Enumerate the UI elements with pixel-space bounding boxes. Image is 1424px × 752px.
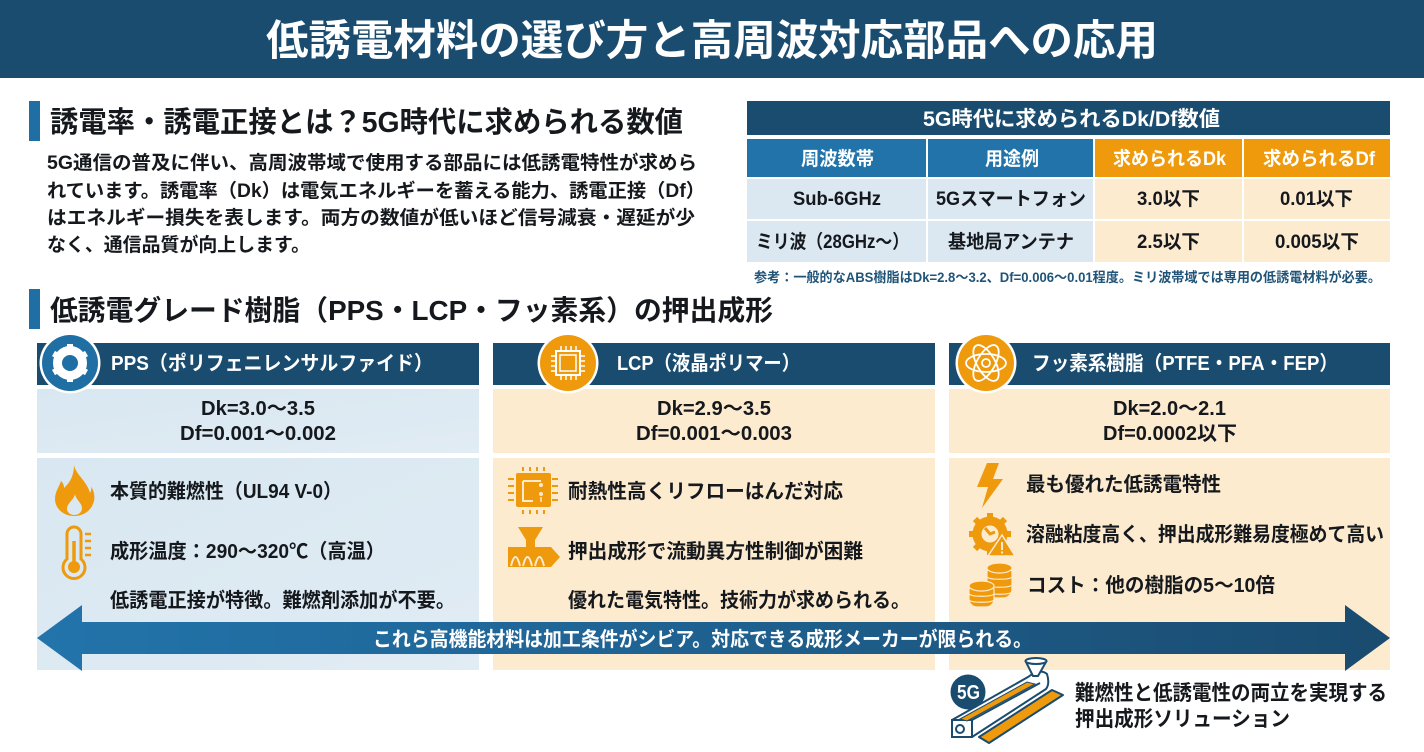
text block: intro paragraph: なく、通信品質が向上します。 [47, 233, 310, 256]
table row: Sub-6GHz: 0.01以下 [1280, 189, 1353, 210]
table header row [747, 139, 1390, 177]
PPS values: Dk=3.0～3.5 [201, 398, 315, 420]
table row: millimeter wave: ミリ波（28GHz～） [756, 231, 909, 253]
arrow: double-headed banner: これら高機能材料は加工条件がシビア。対応できる成形メーカーが限られる。 [373, 627, 1032, 651]
LCP header [493, 343, 935, 385]
table title [747, 101, 1390, 135]
table row: Sub-6GHz: 5Gスマートフォン [936, 189, 1086, 210]
PPS header: PPS（ポリフェニレンサルファイド） [111, 352, 433, 375]
LCP feature: reflow: 耐熱性高くリフローはんだ対応 [568, 480, 843, 503]
table header row: 周波数帯 [801, 148, 874, 170]
panel: fluoropolymer [949, 332, 1390, 670]
table row: Sub-6GHz [747, 179, 1390, 219]
table row: millimeter wave: 2.5以下 [1137, 232, 1200, 253]
icon: circuit board [508, 467, 558, 514]
icon: extruder screw [508, 527, 560, 567]
fluoropolymer header: フッ素系樹脂（PTFE・PFA・FEP） [1032, 352, 1338, 375]
LCP values: Dk=2.9～3.5 [657, 398, 771, 420]
Fluoropolymer values: Df=0.0002以下 [1103, 423, 1237, 445]
text block: intro paragraph: はエネルギー損失を表します。両方の数値が低いほど信号減衰・遅延が少 [47, 206, 695, 229]
panel: PPS [37, 332, 479, 670]
table row: millimeter wave: 0.005以下 [1275, 232, 1359, 253]
LCP values: Df=0.001～0.003 [636, 423, 792, 445]
table header row: 用途例 [985, 148, 1039, 170]
panel: LCP [493, 332, 935, 670]
table row: Sub-6GHz: 3.0以下 [1137, 189, 1200, 210]
icon: coins [969, 563, 1012, 607]
PPS feature: molding temperature: 成形温度：290～320℃（高温） [110, 539, 385, 563]
table row: Sub-6GHz: Sub-6GHz [793, 189, 881, 210]
icon: gear [40, 332, 100, 394]
table header row: 求められるDk [1113, 147, 1226, 170]
LCP values [636, 398, 792, 445]
icon: thermometer [63, 527, 91, 578]
table note: 参考：一般的なABS樹脂はDk=2.8～3.2、Df=0.006～0.01程度。ミリ波帯域では専用の低誘電材料が必要。 [754, 269, 1381, 285]
table header row: 求められるDf [1263, 147, 1376, 170]
text block: intro paragraph: 5G通信の普及に伴い、高周波帯域で使用する部品には低誘電特性が求めら [47, 151, 697, 174]
PPS header [37, 343, 479, 385]
Fluoropolymer values [1103, 398, 1237, 445]
table row: millimeter wave: 基地局アンテナ [948, 231, 1074, 253]
PPS feature: summary: 低誘電正接が特徴。難燃剤添加が不要。 [110, 588, 455, 612]
text block: intro paragraph [47, 151, 705, 256]
table row: millimeter wave [747, 221, 1390, 262]
icon: atom [956, 332, 1016, 394]
PPS feature: flame retardancy: 本質的難燃性（UL94 V-0） [110, 480, 342, 503]
Fluoropolymer feature: viscosity: 溶融粘度高く、押出成形難易度極めて高い [1026, 522, 1384, 546]
icon: lightning [977, 463, 1003, 508]
icon: chip [538, 332, 598, 394]
PPS values: Df=0.001～0.002 [180, 423, 336, 445]
Fluoropolymer feature: dielectric: 最も優れた低誘電特性 [1026, 473, 1221, 496]
icon: gear warning [969, 513, 1015, 556]
table title: 5G時代に求められるDk/Df数値 [923, 108, 1220, 131]
heading: dielectric section: 誘電率・誘電正接とは？5G時代に求められる数値 [50, 106, 683, 139]
LCP header: LCP（液晶ポリマー） [617, 352, 800, 375]
heading: extrusion section: 低誘電グレード樹脂（PPS・LCP・フッ素系）の押出成形 [50, 294, 773, 326]
PPS values [180, 398, 336, 445]
fluoropolymer header [949, 343, 1390, 385]
panel: Dk/Df requirement table [747, 101, 1390, 262]
icon: flame [55, 465, 94, 516]
icon: 5G extrusion profile [950, 658, 1063, 743]
callout: extrusion solution: 押出成形ソリューション [1075, 707, 1290, 731]
LCP feature: extrusion difficulty: 押出成形で流動異方性制御が困難 [568, 539, 863, 563]
callout: extrusion solution [1075, 682, 1387, 731]
callout: extrusion solution: 難燃性と低誘電性の両立を実現する [1075, 682, 1387, 705]
Fluoropolymer feature: cost: コスト：他の樹脂の5～10倍 [1027, 574, 1275, 597]
arrow: double-headed banner [37, 605, 1390, 671]
icon: 5G extrusion profile: 5G [957, 682, 980, 704]
title [0, 0, 1424, 78]
LCP feature: summary: 優れた電気特性。技術力が求められる。 [568, 588, 910, 612]
Fluoropolymer values: Dk=2.0～2.1 [1113, 398, 1226, 420]
title: 低誘電材料の選び方と高周波対応部品への応用 [266, 17, 1158, 64]
text block: intro paragraph: れています。誘電率（Dk）は電気エネルギーを蓄える能力、誘電正接（Df） [47, 180, 705, 202]
